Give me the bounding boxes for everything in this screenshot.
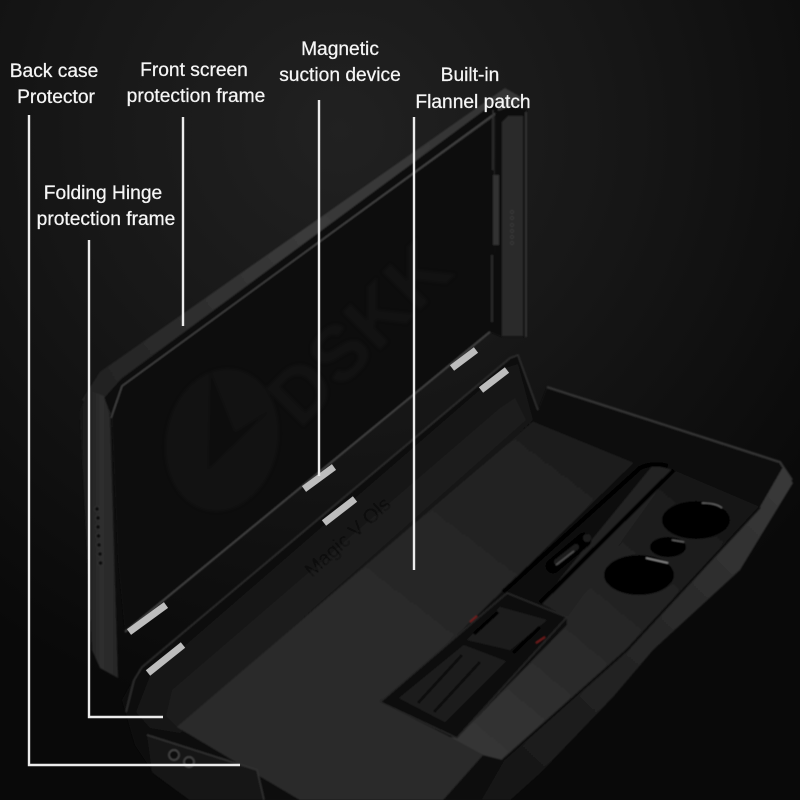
panel: front screen frame [80, 88, 527, 678]
hinge text: Magic V Ols [301, 493, 395, 582]
rail inner shadow line [480, 507, 760, 800]
frame inner dark stripe [104, 100, 498, 416]
case shell [122, 354, 793, 800]
lens hole large upper [662, 501, 730, 539]
frame left side [80, 390, 118, 678]
kickstand upper window [467, 607, 547, 650]
hinge outline [126, 355, 538, 712]
label: built-in flannel patch: Flannel patch [415, 92, 531, 113]
label: folding hinge protection frame: protection frame [37, 209, 175, 230]
kickstand slits [474, 612, 540, 653]
label: back case protector: Back case [10, 61, 98, 82]
label: folding hinge protection frame [37, 183, 175, 230]
leader: folding hinge [89, 240, 163, 717]
charging port cutout [553, 534, 591, 566]
case interior floor [450, 470, 760, 760]
top rim [547, 387, 792, 480]
label: front screen protection frame: Front screen [140, 60, 248, 81]
bottom port holes [169, 750, 194, 767]
leader: flannel patch [413, 117, 415, 570]
bottom end of case [147, 735, 264, 800]
label: front screen protection frame: protection frame [127, 86, 265, 107]
label: magnetic suction device: Magnetic [301, 39, 379, 60]
frame left speaker dots [94, 506, 103, 566]
lens hole small [650, 537, 686, 557]
leader: back case protector [29, 115, 240, 765]
label: magnetic suction device [279, 39, 401, 86]
label: built-in flannel patch: Built-in [441, 65, 499, 86]
panel: back case [122, 354, 793, 800]
flannel patch [177, 422, 633, 800]
tray strip beside port [540, 465, 673, 617]
hinge wall raised band [166, 398, 526, 728]
label: front screen protection frame [127, 60, 265, 107]
frame right side [490, 106, 527, 337]
right rail [480, 467, 793, 800]
magnetic strips [129, 350, 507, 673]
label: back case protector: Protector [17, 87, 96, 108]
hinge wall [136, 364, 533, 733]
frame inner edge [111, 112, 497, 418]
watermark logo: DSKK [250, 224, 468, 442]
leader: magnetic device [318, 100, 320, 476]
watermark logo [152, 224, 468, 522]
frame right speaker dots [511, 211, 513, 244]
label: back case protector [10, 61, 98, 108]
label: built-in flannel patch [415, 65, 531, 113]
leader: front screen frame [182, 117, 184, 326]
lens hole large lower [604, 555, 674, 595]
kickstand lower window [399, 644, 507, 722]
label: folding hinge protection frame: Folding Hinge [44, 183, 162, 204]
camera tray outline [503, 464, 674, 603]
frame hinge edge [125, 332, 490, 632]
frame top band [82, 88, 526, 415]
case inner wall [543, 390, 788, 507]
frame interior [112, 113, 496, 632]
label: magnetic suction device: suction device [279, 65, 401, 86]
folding kickstand [380, 593, 567, 738]
